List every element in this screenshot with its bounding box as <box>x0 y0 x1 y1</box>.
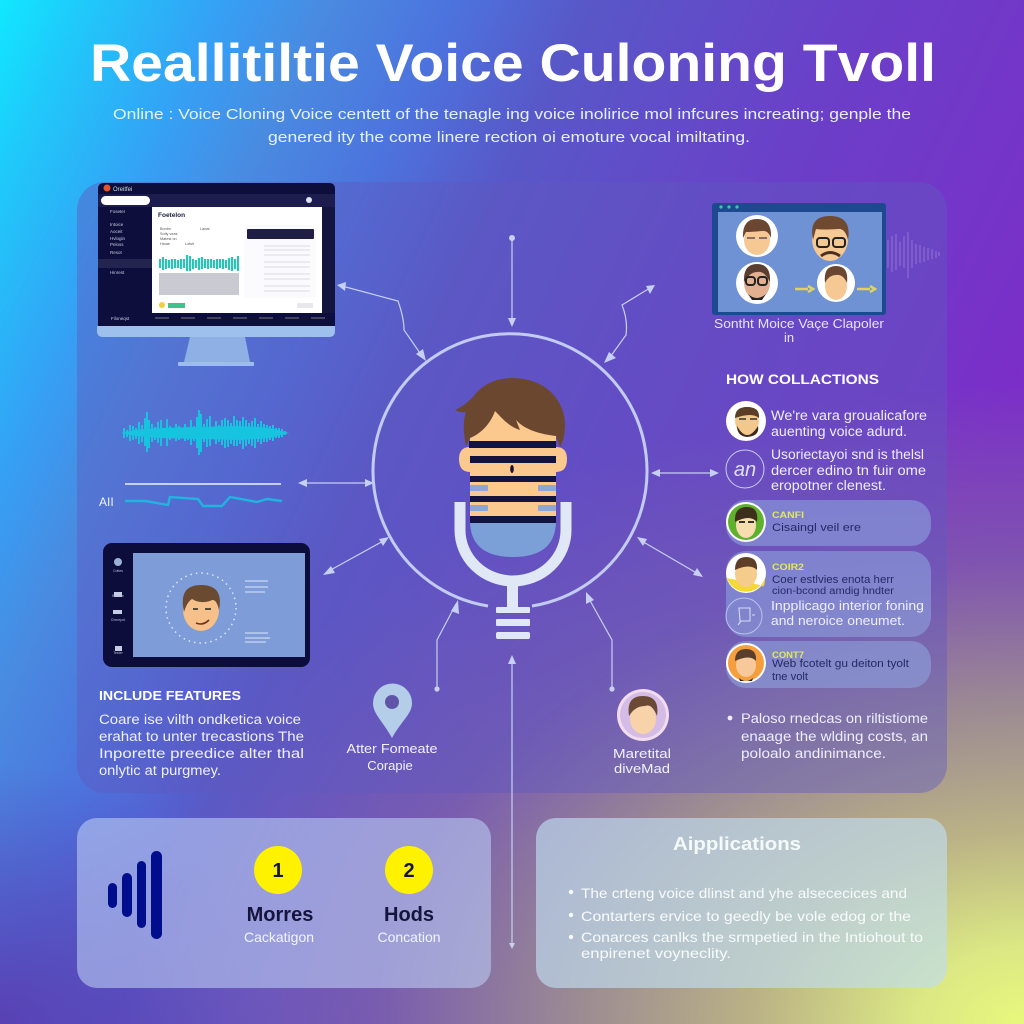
icon: desktop monitor app: Foetelon <box>158 212 185 219</box>
icon: tablet face scan: Cottes <box>113 569 123 573</box>
chart: AI line <box>99 484 282 509</box>
text: item 4: cion-bcond amdig hndter <box>772 586 895 597</box>
icon: desktop monitor app: Hioae <box>160 242 170 246</box>
text: features body: onlytic at purgmey. <box>99 763 221 778</box>
text: item 1: auenting voice adurd. <box>771 424 907 439</box>
text: item 4: Coer estlvies enota herr <box>772 574 894 586</box>
text: item 2 <box>771 447 926 493</box>
label: avatar: Maretital <box>613 746 671 761</box>
arrow: left <box>302 482 370 484</box>
text: item 1 <box>771 408 927 439</box>
text: item 4 <box>771 562 924 628</box>
text: applications list: enpirenet voyneclity. <box>581 945 731 961</box>
avatar: collaborator 1 <box>726 401 766 441</box>
arrow: tablet <box>327 540 385 572</box>
text: item 4: COIR2 <box>772 562 804 573</box>
heading: include features: INCLUDE FEATURES <box>99 688 241 703</box>
icon: desktop monitor app: Sotly veas <box>160 232 178 236</box>
stat 2: Hods <box>384 904 434 926</box>
avatar: moustache man <box>812 216 849 261</box>
subtitle: Online : Voice Cloning Voice centett of the tenagle ing voice inolirice mol infcures increating; genple the <box>113 106 911 123</box>
text: applications list <box>569 885 923 961</box>
avatar: green <box>726 502 766 542</box>
icon: tablet face scan: Brexste <box>112 594 124 598</box>
stat 1: Morres <box>247 904 313 926</box>
text: right bullet: enaage the wlding costs, an <box>741 729 928 744</box>
stat 2: 2 <box>403 860 415 882</box>
text: item 5: tne volt <box>772 671 808 683</box>
icon: desktop monitor app: Oreitfei <box>113 187 132 193</box>
text: item 5: CONT7 <box>772 650 804 661</box>
subtitle: genered ity the come linere rection oi emoture vocal imiltating. <box>268 129 750 146</box>
waveform: app <box>160 255 238 271</box>
arrows: yellow <box>795 286 875 292</box>
subtitle <box>113 106 911 146</box>
icon: tablet face scan <box>103 543 310 667</box>
stat 2 <box>377 846 441 945</box>
icon: desktop monitor app: Foseter <box>110 209 126 214</box>
stat 1 <box>244 846 314 945</box>
text: features body <box>99 712 304 778</box>
icon: outlined ai circle <box>726 450 764 488</box>
label: pin: Corapie <box>367 758 413 773</box>
icon: location pin <box>373 684 412 738</box>
icon: bottom sound bars <box>108 851 162 939</box>
text: item 4: Inpplicago interior foning <box>771 598 924 613</box>
arrow: right <box>655 472 715 474</box>
label: pin: Atter Fomeate <box>346 741 438 756</box>
icon: document circle <box>726 598 762 634</box>
text: item 3: Cisaingl veil ere <box>772 522 861 534</box>
arrow: pin <box>437 604 456 688</box>
icon: desktop monitor app: Peloss <box>110 242 124 247</box>
text: features body: erahat to unter trecastions The <box>99 729 304 744</box>
caption: video window <box>714 316 885 345</box>
icon: desktop monitor app: Lotsh <box>185 242 194 246</box>
arrow: avatar <box>588 597 612 688</box>
avatar: glasses man <box>736 215 778 257</box>
icon: desktop monitor app <box>97 183 335 366</box>
stat 2: Concation <box>377 929 441 945</box>
text: right bullet: poloalo andinimance. <box>741 746 886 761</box>
avatar: marketing <box>617 689 669 741</box>
text: item 2: dercer edino tn fuir ome <box>771 463 926 478</box>
icon: desktop monitor app: Bonlm <box>160 227 171 231</box>
text: applications list: Conarces canlks the srmpetied in the Intiohout to <box>581 929 923 945</box>
text: item 3: CANFI <box>772 510 804 521</box>
panel: main <box>77 182 947 793</box>
icon: desktop monitor app: Filoneqst <box>111 316 130 321</box>
heading: how collactions: HOW COLLACTIONS <box>726 371 879 387</box>
text: right bullet: Paloso rnedcas on riltistiome <box>741 711 928 726</box>
stat 1: Cackatigon <box>244 929 314 945</box>
icon: desktop monitor app: antitates <box>110 261 128 266</box>
text: right bullet <box>728 711 928 761</box>
heading: applications: Aipplications <box>673 834 801 854</box>
waveform: main <box>121 410 289 455</box>
label: avatar: diveMad <box>614 761 670 776</box>
icon: tablet face scan: Cherepot <box>111 618 125 622</box>
arrows <box>302 238 715 946</box>
text: applications list: Contarters ervice to geedly be vole edog or the <box>581 908 911 924</box>
text: features body: Coare ise vilth ondketica voice <box>99 712 301 727</box>
icon: desktop monitor app: Aoceit <box>110 229 123 234</box>
caption: video window: Sontht Moice Vaçe Clapoler <box>714 316 885 331</box>
panel: applications <box>536 818 947 988</box>
text: item 4: and neroice oneumet. <box>771 613 905 628</box>
avatar: yellow <box>726 553 766 593</box>
icon: desktop monitor app: Hvlogin <box>110 236 126 241</box>
label: pin <box>346 741 438 773</box>
text: item 1: We're vara groualicafore <box>771 408 927 423</box>
stat 1: 1 <box>272 860 284 882</box>
label: avatar <box>613 746 671 776</box>
icon: desktop monitor app: Hinrest <box>110 270 125 275</box>
arrow: long vertical <box>511 660 513 946</box>
icon: central ring <box>373 334 647 606</box>
text: item 2: eropotner clenest. <box>771 478 886 493</box>
text: applications list: The crteng voice dlinst and yhe alsececices and <box>581 885 907 901</box>
icon: outlined ai circle: an <box>734 459 756 481</box>
avatar: orange <box>726 643 766 683</box>
icon: tablet face scan: Tester <box>113 651 124 655</box>
icon: striped face with microphone <box>455 378 567 639</box>
icon: desktop monitor app: Resot <box>110 250 123 255</box>
icon: desktop monitor app: Matest on <box>160 237 177 241</box>
arrow: video window <box>608 288 650 360</box>
icon: video call window <box>712 203 886 315</box>
arrow: monitor <box>342 286 422 356</box>
icon: faint waveform <box>888 232 939 278</box>
arrow: lower right <box>640 540 700 575</box>
text: features body: Inporette preedice alter thal <box>99 746 304 761</box>
arrowheads <box>298 235 719 949</box>
icon: desktop monitor app: Lanat <box>200 227 210 231</box>
title: Reallitiltie Voice Culoning Tvoll <box>90 34 936 93</box>
avatar: bearded man <box>736 262 778 304</box>
text: item 5: Web fcotelt gu deiton tyolt <box>772 658 909 670</box>
text: item 2: Usoriectayoi snd is thelsl <box>771 447 924 462</box>
text: item 5 <box>772 650 909 683</box>
arrow: top <box>511 238 513 322</box>
text: item 3 <box>772 510 861 534</box>
avatar: young man <box>817 264 855 302</box>
pills <box>726 500 931 688</box>
caption: video window: in <box>784 330 794 345</box>
chart: AI line: AII <box>99 495 114 509</box>
panel: bottom left <box>77 818 491 988</box>
icon: desktop monitor app: Intoice <box>110 222 124 227</box>
